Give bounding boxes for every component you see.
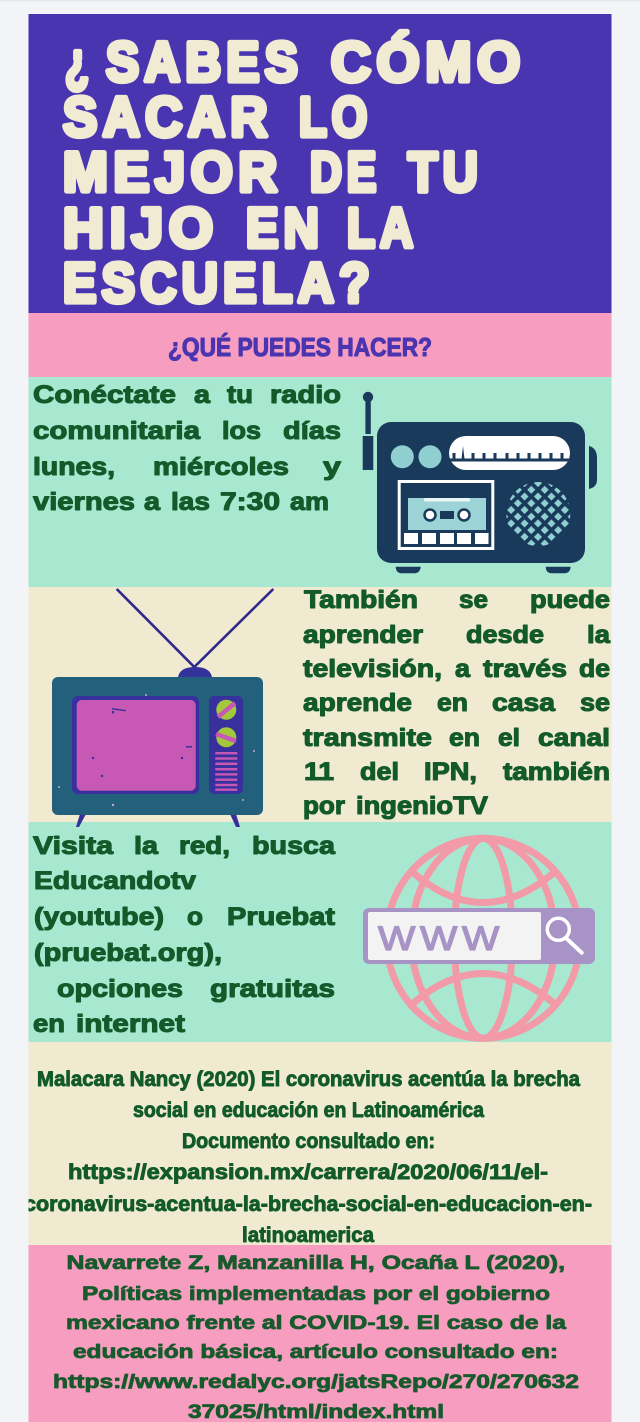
title: HIJO <box>63 196 219 259</box>
text block: internet: busca <box>252 832 336 860</box>
panel: radio <box>28 377 612 587</box>
text block: Navarrete citation: Navarrete Z, Manzanilla H, Ocaña L (2020), <box>66 1252 565 1274</box>
text block: internet: en <box>33 1010 65 1038</box>
text block: internet: la <box>134 832 159 860</box>
text block: Malacara citation: Malacara Nancy (2020) El coronavirus acentúa la brecha <box>37 1068 580 1091</box>
text block: television: través <box>483 655 567 683</box>
title: LO <box>299 85 372 148</box>
text block: television: a <box>455 655 471 683</box>
text block: television: se <box>459 586 488 614</box>
text block: television: IPN, <box>424 758 477 786</box>
text block: Navarrete citation: mexicano frente al COVID-19. El caso de la <box>66 1312 566 1334</box>
text block: internet: Visita <box>33 832 114 860</box>
title: SABES <box>106 30 303 93</box>
icon: television <box>52 589 273 827</box>
title: EN <box>246 196 324 259</box>
text block: television: 11 <box>304 758 334 786</box>
text block: television: ingenioTV <box>356 792 488 820</box>
text block: television: por <box>303 792 345 820</box>
text block: radio: días <box>283 417 341 445</box>
text block: television: casa <box>492 689 556 717</box>
title: ESCUELA? <box>63 251 375 314</box>
text block: internet: opciones <box>57 975 183 1003</box>
text block: television: el <box>498 724 520 752</box>
title: CÓMO <box>331 30 526 93</box>
text block: Malacara citation: Documento consultado en: <box>182 1130 435 1153</box>
title: DE <box>310 140 381 203</box>
text block: Malacara citation: coronavirus-acentua-la-brecha-social-en-educacion-en- <box>24 1193 592 1216</box>
title: MEJOR <box>63 140 283 203</box>
text block: television: de <box>579 655 610 683</box>
panel: reference one <box>24 1042 612 1247</box>
text block: radio <box>33 381 341 516</box>
text block: radio: miércoles <box>153 453 289 481</box>
text block: radio: am <box>290 488 329 516</box>
icon: radio <box>363 392 597 573</box>
text block: television: en <box>437 689 468 717</box>
text block: radio: comunitaria <box>33 417 201 445</box>
text block: radio: las <box>171 488 210 516</box>
panel: reference two <box>28 1245 612 1422</box>
text block: Malacara citation <box>24 1068 592 1247</box>
text block: television: transmite <box>303 724 432 752</box>
icon: globe with search bar <box>363 838 595 1038</box>
title: TU <box>408 140 483 203</box>
text block: radio: lunes, <box>33 453 115 481</box>
text block: Navarrete citation: https://www.redalyc.org/jatsRepo/270/270632 <box>53 1371 579 1393</box>
icon: globe with search bar: WWW <box>378 920 504 958</box>
text block: internet <box>33 832 336 1038</box>
text block: internet: (youtube) <box>34 903 164 931</box>
text block: television: se <box>580 689 610 717</box>
text block: radio: viernes <box>33 488 135 516</box>
text block: television: puede <box>530 586 610 614</box>
text block: internet: o <box>187 903 203 931</box>
text block: radio: Conéctate <box>33 381 176 409</box>
text block: television: la <box>587 621 611 649</box>
text block: internet: gratuitas <box>210 975 335 1003</box>
text block: television: desde <box>466 621 544 649</box>
text block: television: aprender <box>303 621 423 649</box>
text block: internet: red, <box>179 832 230 860</box>
panel: television <box>28 586 612 827</box>
text block: television: canal <box>538 724 610 752</box>
text block: radio: y <box>323 453 341 481</box>
title: ¿ <box>65 30 93 93</box>
panel: title <box>28 14 612 314</box>
text block: Malacara citation: latinoamerica <box>242 1224 374 1247</box>
text block: Navarrete citation: educación básica, artículo consultado en: <box>73 1341 558 1363</box>
text block: internet: (pruebat.org), <box>34 939 222 967</box>
text block: internet: Educandotv <box>34 867 196 895</box>
text block: radio: los <box>222 417 261 445</box>
text block: television: también <box>503 758 610 786</box>
text block: radio: 7:30 <box>220 488 280 516</box>
panel: subtitle <box>28 313 612 377</box>
text block: television: También <box>304 586 418 614</box>
panel: internet <box>28 822 612 1042</box>
text block: Malacara citation: https://expansion.mx/carrera/2020/06/11/el- <box>68 1161 548 1184</box>
title: LA <box>347 196 418 259</box>
heading: que puedes hacer: ¿QUÉ PUEDES HACER? <box>168 332 432 362</box>
text block: radio: tu <box>227 381 253 409</box>
title: SACAR <box>63 85 273 148</box>
text block: radio: a <box>144 488 161 516</box>
text block: television: aprende <box>303 689 412 717</box>
text block: television: del <box>360 758 399 786</box>
text block: Navarrete citation <box>53 1252 579 1422</box>
text block: television: televisión, <box>303 655 442 683</box>
text block: Navarrete citation: Políticas implementadas por el gobierno <box>82 1283 550 1305</box>
text block: internet: Pruebat <box>227 903 336 931</box>
text block: internet: internet <box>76 1010 186 1038</box>
text block: Malacara citation: social en educación en Latinoamérica <box>133 1099 484 1122</box>
title <box>63 30 526 314</box>
text block: television: en <box>449 724 480 752</box>
text block: radio: a <box>194 381 211 409</box>
text block: radio: radio <box>270 381 341 409</box>
text block: television <box>303 586 611 820</box>
